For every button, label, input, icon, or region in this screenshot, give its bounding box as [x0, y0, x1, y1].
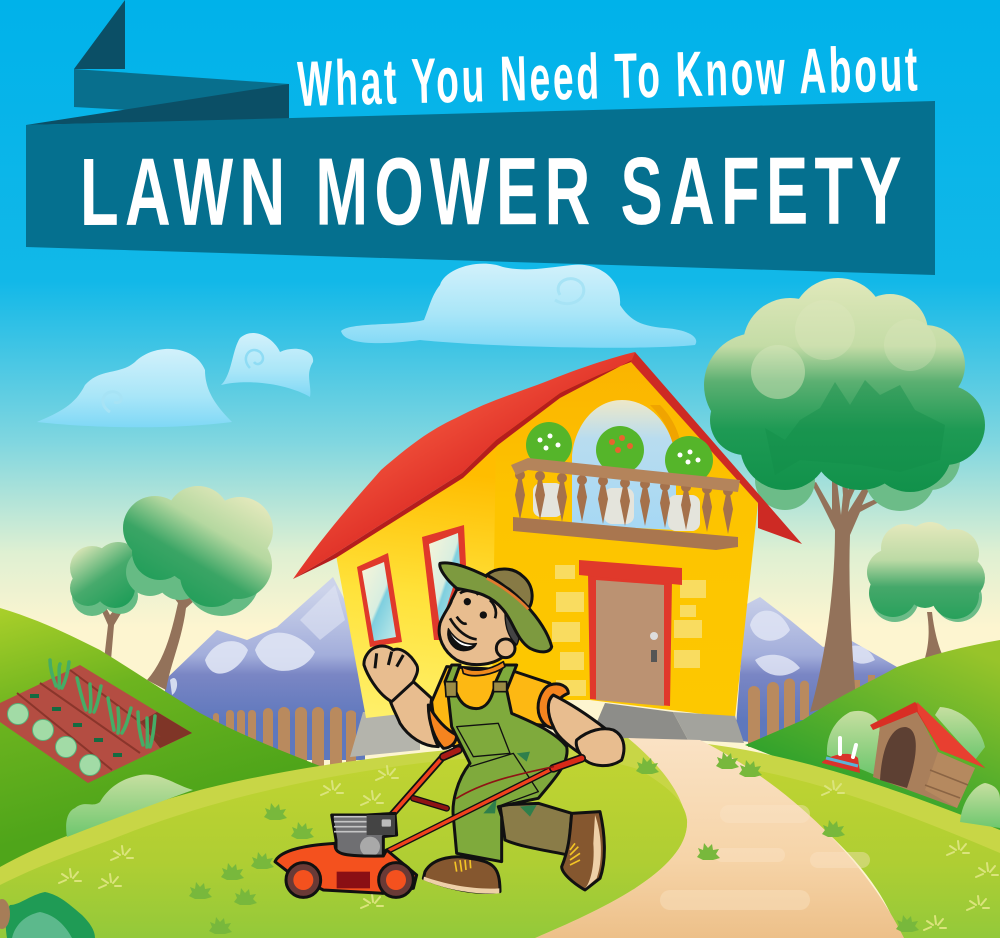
mower vent [337, 872, 370, 888]
back boot [562, 812, 604, 890]
front lawn [0, 738, 687, 938]
dog bowl [822, 738, 860, 773]
bricks [552, 565, 706, 696]
boot laces [455, 843, 580, 872]
left forearm [390, 682, 438, 747]
left wall [336, 440, 496, 718]
vegetable patch [0, 660, 192, 783]
left sleeve cuff [428, 705, 457, 748]
house [293, 352, 802, 757]
dog house [822, 702, 985, 808]
subtitle: What You Need To Know About [297, 34, 918, 121]
banner ribbon [26, 101, 935, 275]
shirt [432, 667, 553, 747]
house base [350, 712, 420, 757]
hair [505, 613, 519, 645]
overalls [445, 665, 567, 862]
left cloud [37, 349, 232, 427]
right mountains [735, 597, 897, 760]
clouds [37, 264, 696, 427]
scarf [462, 662, 505, 676]
right lawn [700, 743, 1000, 938]
roof [293, 352, 802, 579]
head [439, 589, 512, 665]
mower wheels [286, 863, 413, 897]
title banner [26, 0, 935, 275]
large right tree [704, 278, 985, 712]
door [579, 560, 682, 706]
overall buckles [445, 682, 507, 697]
right sleeve cuff [538, 684, 568, 728]
left window [357, 553, 402, 647]
back leg [500, 803, 572, 855]
hand [576, 729, 624, 766]
flower pots [533, 483, 700, 531]
left hill [0, 608, 330, 885]
grass tufts [59, 752, 998, 934]
large cloud [341, 264, 696, 348]
right window [422, 525, 466, 640]
right hill [745, 640, 1000, 840]
banner fold [26, 0, 289, 125]
left mountains [165, 577, 365, 760]
front tree [123, 486, 273, 690]
path highlights [660, 805, 870, 910]
picket fences [213, 675, 875, 768]
leaf stains [483, 752, 537, 817]
face [448, 591, 496, 651]
right wall [490, 356, 758, 718]
small trees left [70, 486, 273, 690]
garden path [535, 738, 904, 938]
small right tree [867, 522, 985, 658]
mower engine [332, 813, 397, 857]
right arm [548, 695, 605, 753]
bushes [0, 775, 193, 938]
mower deck [275, 843, 417, 893]
overall pocket [457, 723, 538, 805]
plants [526, 422, 713, 484]
small cloud [221, 333, 313, 397]
back tree [70, 542, 142, 660]
main title: LAWN MOWER SAFETY [80, 137, 902, 246]
mower handle [387, 750, 582, 852]
right bushes [827, 707, 1000, 828]
balcony arch [572, 400, 676, 530]
steps [590, 703, 744, 743]
hat [440, 563, 552, 652]
gardener with lawn mower [275, 563, 624, 897]
ear [496, 639, 515, 658]
fist [364, 646, 418, 702]
front boot [423, 857, 500, 893]
mountains [165, 577, 897, 760]
balcony [511, 458, 740, 550]
